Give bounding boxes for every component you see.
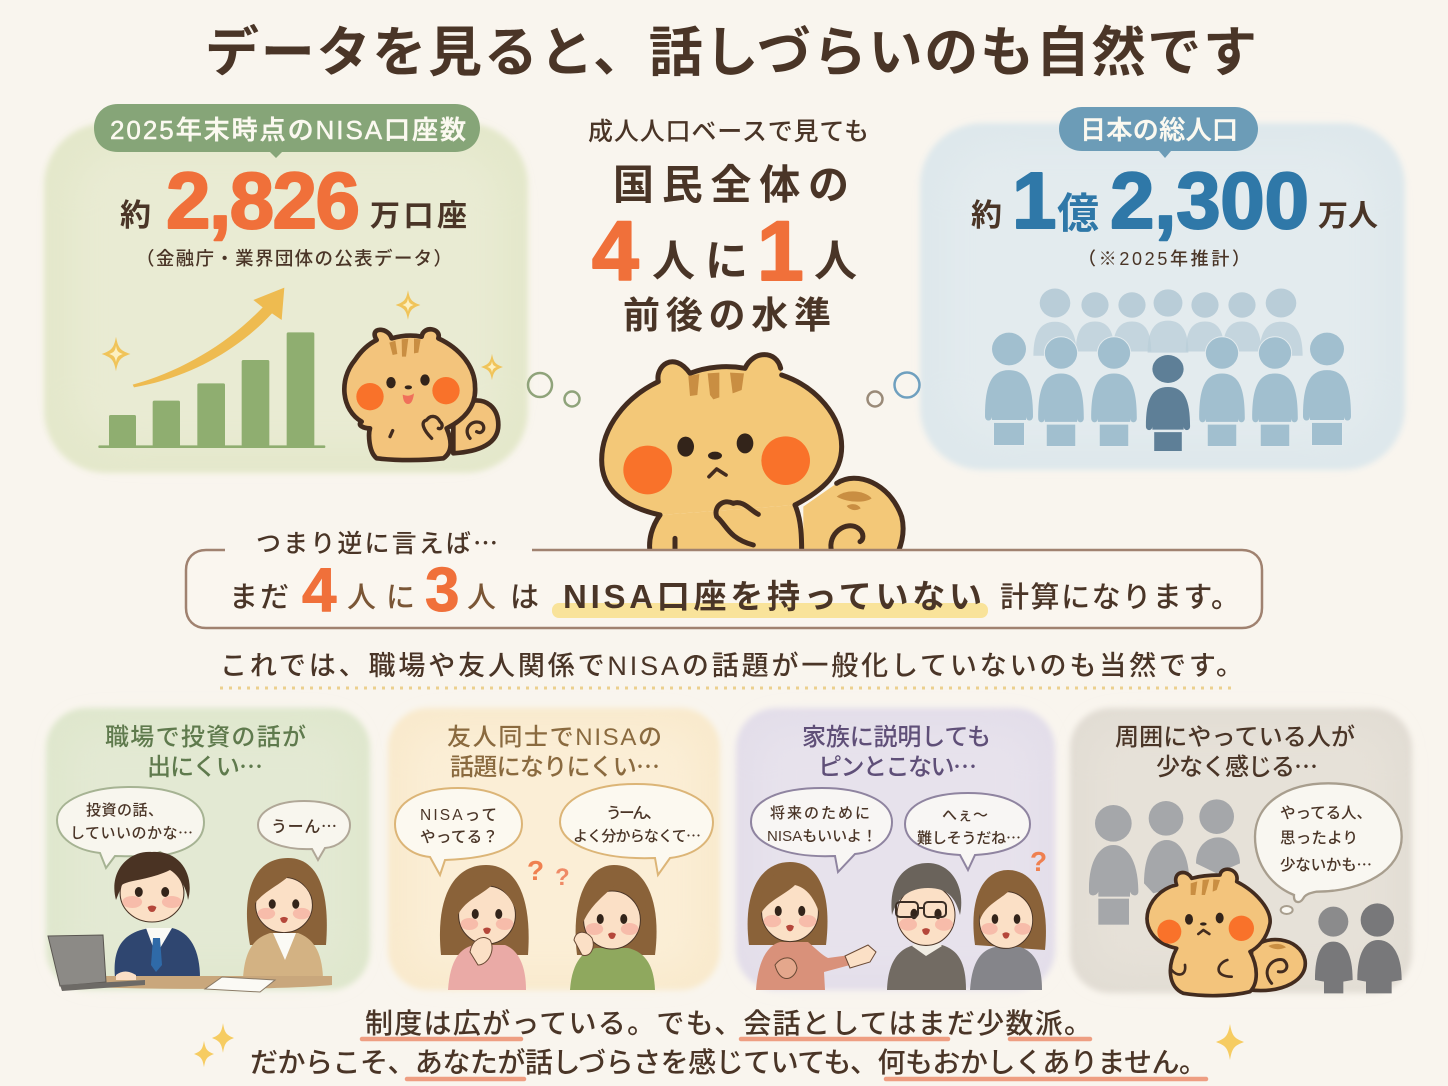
population figure: 1 xyxy=(1012,156,1056,245)
center message: 4 xyxy=(592,204,639,298)
panel: workplace xyxy=(46,708,370,992)
lead-in: つまり逆に言えば… xyxy=(256,524,498,560)
panel: friends xyxy=(388,708,720,990)
people crowd xyxy=(985,289,1351,451)
heading xyxy=(1115,724,1355,782)
thought bubble xyxy=(1255,783,1402,914)
source note: （金融庁・業界団体の公表データ） xyxy=(136,248,452,269)
question marks: ? xyxy=(527,855,544,886)
population figure: 2,300 xyxy=(1110,156,1309,245)
population figure xyxy=(971,156,1378,245)
speech bubble: man: 投資の話、 xyxy=(86,802,163,819)
speech bubble: response: へぇ〜 xyxy=(942,807,988,824)
conclusion sentence: これでは、職場や友人関係でNISAの話題が一般化していないのも当然です。 xyxy=(220,651,1243,681)
speech bubble: ask xyxy=(395,788,522,875)
speech bubble: explain: 将来のために xyxy=(770,805,870,822)
speech bubble: response xyxy=(905,793,1030,870)
speech bubble: man xyxy=(57,787,204,868)
woman explaining xyxy=(748,862,876,990)
heading xyxy=(447,724,662,782)
callout box xyxy=(186,524,1262,628)
panel: NISA accounts xyxy=(44,104,528,473)
speech bubble: reply: うーん、 xyxy=(606,805,661,822)
thought bubbles right xyxy=(868,372,920,406)
closing message: だからこそ、あなたが話しづらさを感じていても、何もおかしくありません。 xyxy=(250,1047,1207,1078)
heading: ピンとこない… xyxy=(818,747,977,782)
heading: 友人同士でNISAの xyxy=(447,724,662,751)
center message: 人に xyxy=(652,238,748,286)
population figure: 約 xyxy=(971,198,1002,233)
bubble text xyxy=(1280,804,1372,875)
underline accents xyxy=(362,1039,1206,1079)
older woman xyxy=(970,870,1046,990)
speech bubble: reply: よく分からなくて… xyxy=(573,825,701,846)
speech bubble: explain: NISAもいいよ！ xyxy=(767,828,877,845)
account figure: 約 xyxy=(120,198,151,233)
panel: total population xyxy=(920,107,1405,470)
heading xyxy=(802,724,991,782)
title: データを見ると、話しづらいのも自然です xyxy=(205,23,1257,83)
center message: 成人人口ベースで見ても xyxy=(588,118,869,146)
center message: 人 xyxy=(814,238,857,286)
question marks: ? xyxy=(555,864,570,891)
squirrel: happy xyxy=(344,329,498,460)
grey silhouettes xyxy=(1089,799,1402,993)
center message: 前後の水準 xyxy=(623,295,831,336)
heading xyxy=(105,724,306,782)
callout statement: 3 xyxy=(425,556,459,625)
estimate note: （※2025年推計） xyxy=(1078,249,1250,269)
speech bubble: response: 難しそうだね… xyxy=(917,827,1021,848)
population figure: 億 xyxy=(1057,190,1099,237)
heading: 家族に説明しても xyxy=(802,724,991,751)
callout statement: 人 は xyxy=(467,582,539,614)
thought bubbles left xyxy=(528,373,580,406)
account figure: 2,826 xyxy=(166,156,360,245)
woman in blazer xyxy=(243,858,327,978)
account figure: 万口座 xyxy=(370,200,467,233)
closing message: 制度は広がっている。でも、会話としてはまだ少数派。 xyxy=(365,1008,1092,1039)
sparkles around closing message xyxy=(194,1023,1244,1067)
older man with glasses xyxy=(887,863,966,990)
question marks xyxy=(527,855,570,891)
laptop and table xyxy=(48,935,332,992)
population figure: 万人 xyxy=(1318,200,1378,233)
callout statement: NISA口座を持っていない xyxy=(563,578,982,615)
speech bubble: reply xyxy=(560,784,713,875)
squirrel: worried xyxy=(1147,869,1305,996)
speech bubble: explain xyxy=(751,788,892,872)
speech bubble: man: していいのかな… xyxy=(70,822,193,843)
callout statement xyxy=(229,556,1240,625)
callout statement: 4 xyxy=(302,556,337,625)
center message xyxy=(588,118,869,336)
speech bubble: ask: やってる？ xyxy=(420,828,498,846)
callout statement: まだ xyxy=(229,582,289,614)
speech bubble: woman: うーん… xyxy=(271,813,337,837)
callout statement: 計算になります。 xyxy=(1000,581,1240,614)
label pill: NISA accounts xyxy=(94,104,480,158)
closing message xyxy=(250,1008,1207,1078)
center message: 国民全体の xyxy=(613,162,849,208)
heading: 周囲にやっている人が xyxy=(1115,724,1355,751)
bubble text: やってる人、 xyxy=(1280,804,1372,822)
sparkle icons xyxy=(102,290,503,380)
man in suit xyxy=(114,852,200,978)
bubble text: 思ったより xyxy=(1280,829,1358,847)
speech bubble: woman xyxy=(258,801,350,860)
speech bubble: ask: NISAって xyxy=(420,807,497,824)
center message: 1 xyxy=(757,204,804,298)
question mark: ? xyxy=(1030,846,1047,877)
bar chart with rising arrow xyxy=(98,288,325,448)
callout statement: 人に xyxy=(347,582,415,614)
main squirrel xyxy=(602,355,903,553)
heading: 職場で投資の話が xyxy=(105,724,306,751)
woman in green xyxy=(570,865,657,990)
label pill: population xyxy=(1059,107,1258,158)
account figure xyxy=(120,156,467,245)
label pill: NISA accounts: 2025年末時点のNISA口座数 xyxy=(110,115,466,145)
panel: surroundings xyxy=(1070,708,1412,996)
heading: 少なく感じる… xyxy=(1156,747,1318,782)
highlight marker xyxy=(552,603,988,618)
heading: 話題になりにくい… xyxy=(450,747,660,782)
panel: family xyxy=(736,708,1055,990)
bubble text: 少ないかも… xyxy=(1280,853,1372,875)
label pill: population: 日本の総人口 xyxy=(1080,115,1238,145)
woman in pink xyxy=(440,865,529,990)
heading: 出にくい… xyxy=(147,747,263,782)
